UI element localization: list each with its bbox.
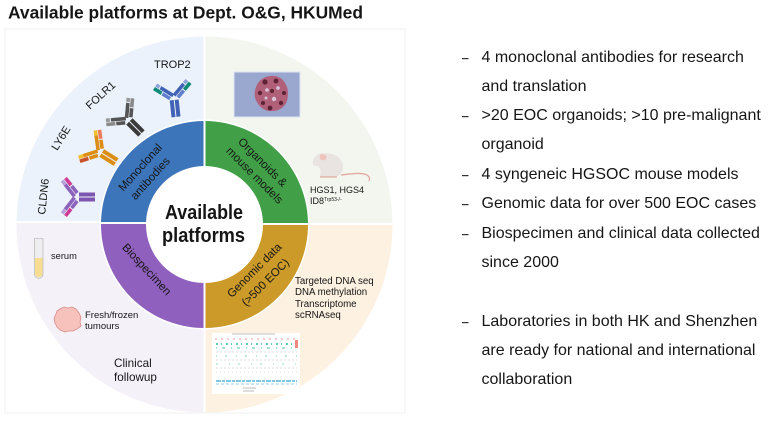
bullet: laboratories: are ready for national and international (482, 342, 755, 359)
bullet: genomic data: Genomic data for over 500 EOC cases (482, 195, 756, 212)
label: fresh/frozen tumours (85, 310, 138, 332)
bullet: organoids: >20 EOC organoids; >10 pre-malignant (482, 107, 761, 124)
bullet: monoclonal antibodies: and translation (482, 78, 586, 95)
label: LY6E: LY6E (49, 124, 73, 153)
icon: FOLR1 antibody (102, 94, 155, 147)
ring segment: monoclonal antibodies (101, 121, 204, 222)
panel: organoids background (206, 36, 392, 223)
icon: TROP2 antibody (152, 78, 195, 119)
label: clinical followup: followup (114, 371, 157, 384)
panel: antibodies background (16, 36, 204, 221)
label: CLDN6: CLDN6 (36, 178, 52, 215)
ring segment: biospecimen (101, 224, 204, 328)
text block: platform summary bullets (462, 49, 761, 388)
label: genomic data types: Transcriptome (295, 299, 357, 310)
diagram: available platforms wheel (5, 29, 405, 413)
ring segment: genomic data: Genomic data (225, 241, 285, 300)
bullet: monoclonal antibodies: 4 monoclonal antibodies for research (482, 49, 744, 66)
bullet: monoclonal antibodies (462, 49, 744, 95)
label: clinical followup (114, 357, 157, 384)
ring segment: monoclonal antibodies: Monoclonal (117, 142, 165, 194)
bullet: biospecimen: since 2000 (482, 254, 559, 271)
ring segment: genomic data (206, 225, 308, 328)
label: mouse models (310, 185, 364, 206)
bullet: laboratories: collaboration (482, 371, 572, 388)
bullet: laboratories: Laboratories in both HK and Shenzhen (482, 313, 757, 330)
center label (148, 168, 262, 282)
icon: CLDN6 antibody (61, 177, 95, 217)
label: genomic data types (295, 276, 374, 321)
panel: biospecimen background (16, 223, 204, 412)
ring segment: organoids and mouse models (206, 121, 308, 223)
image: organoid micrograph (234, 72, 300, 117)
label: clinical followup: Clinical (114, 357, 152, 370)
label: TROP2: TROP2 (154, 59, 191, 71)
icon: serum tube (34, 238, 43, 278)
label: mouse models: HGS1, HGS4 (310, 185, 364, 195)
bullet: laboratories (462, 313, 757, 388)
bullet: organoids: organoid (482, 136, 544, 153)
ring segment: biospecimen: Biospecimen (119, 242, 173, 298)
center label: platforms (162, 225, 245, 247)
label: serum: serum (51, 251, 77, 261)
ring segment: organoids and mouse models: Organoids & (235, 136, 289, 190)
ring segment: monoclonal antibodies: antibodies (129, 155, 173, 202)
label: genomic data types: DNA methylation (295, 287, 367, 298)
icon: tumour (54, 307, 81, 332)
center label: Available (165, 202, 243, 224)
chart: genomic heatmap thumbnail (212, 333, 300, 394)
bullet: organoids (462, 107, 761, 153)
label: mouse models: ID8 (310, 196, 324, 206)
panel: genomic background (206, 225, 392, 412)
bullet: biospecimen: Biospecimen and clinical data collected (482, 225, 760, 242)
label: mouse models: Trp53-/- (324, 197, 342, 203)
label: fresh/frozen tumours: Fresh/frozen (85, 310, 138, 321)
label: fresh/frozen tumours: tumours (85, 321, 120, 332)
ring segment: genomic data: (>500 EOC) (240, 257, 292, 309)
label: genomic data types: Targeted DNA seq (295, 276, 374, 287)
bullet: biospecimen (462, 225, 760, 271)
bullet: mouse models: 4 syngeneic HGSOC mouse models (482, 166, 738, 183)
label: FOLR1: FOLR1 (84, 79, 118, 112)
title: Available platforms at Dept. O&G, HKUMed (8, 2, 363, 22)
icon: mouse (313, 153, 370, 181)
icon: LY6E antibody (75, 126, 127, 179)
label: genomic data types: scRNAseq (295, 310, 341, 321)
ring segment: organoids and mouse models: mouse models (223, 145, 285, 207)
